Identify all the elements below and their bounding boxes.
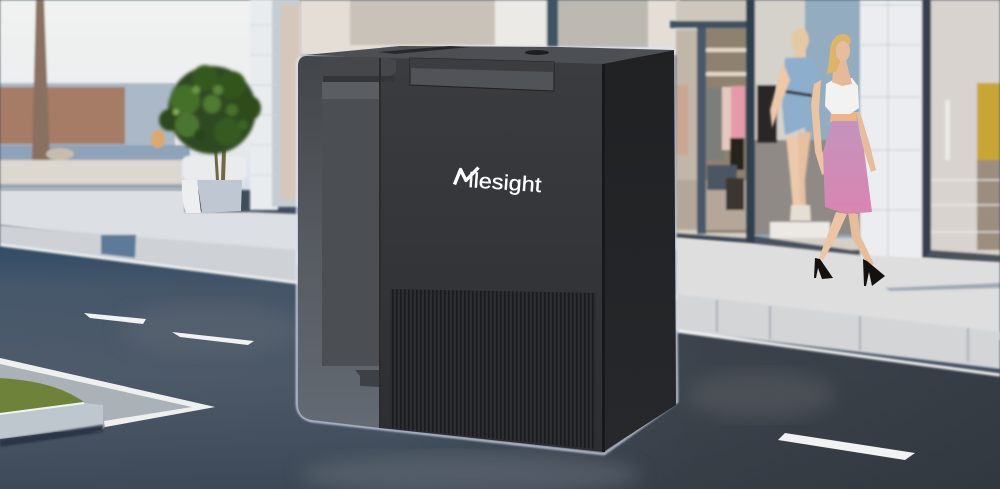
storefront: right windows <box>670 0 1000 265</box>
top flap <box>410 58 554 91</box>
skirt <box>823 121 872 214</box>
neck and hair <box>832 60 852 86</box>
mannequin <box>770 28 820 221</box>
logo: ilesight <box>468 169 542 197</box>
traffic island with grass <box>0 358 215 447</box>
clothing rail <box>676 85 777 210</box>
bottom edge <box>602 64 605 452</box>
tiled white pillar <box>860 0 922 262</box>
top face <box>305 46 674 64</box>
device glow outline <box>297 47 677 454</box>
crop top <box>825 78 859 114</box>
road <box>0 246 1000 489</box>
road dashes <box>84 313 915 460</box>
storefront: left pillar and door <box>250 0 301 210</box>
sidewalks <box>0 190 1000 340</box>
potted tree <box>159 65 261 213</box>
curbs and road edge lines <box>0 225 1000 375</box>
woman walking <box>811 34 885 286</box>
legs <box>819 212 847 260</box>
right side face <box>603 50 676 452</box>
storefront: upper facade behind device <box>300 0 680 55</box>
device <box>298 46 676 452</box>
midriff <box>830 112 857 122</box>
vent grille <box>390 289 596 449</box>
shoes <box>814 258 833 279</box>
arms <box>811 80 828 175</box>
transparent left section <box>298 56 380 428</box>
front face <box>380 58 604 452</box>
seam <box>379 58 381 428</box>
background: sky and distant street <box>0 0 300 190</box>
far right window <box>922 0 1000 265</box>
